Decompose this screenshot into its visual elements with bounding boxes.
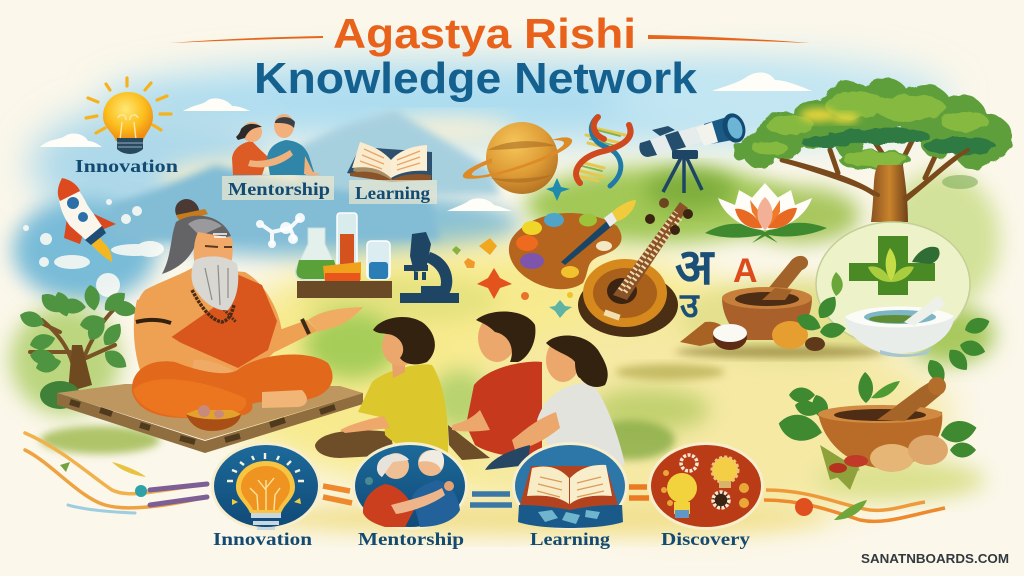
script glyphs xyxy=(675,238,758,326)
crossed legs xyxy=(132,354,333,418)
icon: light bulb top xyxy=(86,78,171,154)
arm band xyxy=(136,320,171,323)
star: teal xyxy=(546,178,570,201)
hand raised xyxy=(308,307,363,332)
badge: learning xyxy=(512,442,628,530)
title line one: Agastya Rishi xyxy=(333,10,636,57)
label: Learning top xyxy=(349,180,437,204)
icon: planet xyxy=(463,122,572,194)
face xyxy=(194,232,233,282)
icon: rocket xyxy=(58,178,116,262)
script glyphs: अ xyxy=(675,238,715,296)
icon: white mortar and pestle xyxy=(845,296,992,386)
icon: veena instrument xyxy=(578,198,693,337)
offering bowl xyxy=(186,405,241,431)
raised arm xyxy=(252,320,317,353)
icon: wooden mortar xyxy=(680,256,847,351)
title xyxy=(170,10,810,103)
icon: microscope xyxy=(400,232,459,303)
ground wash xyxy=(10,167,1000,536)
connector: learning to discovery xyxy=(629,487,649,498)
title line right xyxy=(648,35,810,43)
sky wash xyxy=(13,58,950,302)
mountains xyxy=(110,110,500,240)
icon: telescope xyxy=(639,110,749,193)
label: Innovation top: Innovation xyxy=(75,156,178,176)
icon: mentorship figures xyxy=(232,114,322,176)
lowered arm xyxy=(134,295,202,364)
connector: mentorship to learning xyxy=(470,494,512,505)
title line two: Knowledge Network xyxy=(254,54,698,103)
tree large xyxy=(732,78,1012,222)
connector: innovation to mentorship xyxy=(323,486,352,503)
icon: lotus xyxy=(705,183,827,243)
badge: innovation xyxy=(211,442,321,530)
eyes and brows xyxy=(205,246,232,247)
icon: flasks and test tubes xyxy=(256,213,392,298)
clouds xyxy=(40,72,812,211)
label: Mentorship top: Mentorship xyxy=(228,179,330,199)
icon: DNA helix xyxy=(574,117,631,186)
icon: mortar with herbs xyxy=(776,372,979,490)
stone platform xyxy=(57,384,363,453)
label: Innovation bottom: Innovation xyxy=(213,529,312,549)
label: Mentorship top xyxy=(222,176,334,200)
script glyphs: उ xyxy=(679,286,700,326)
label: Mentorship bottom: Mentorship xyxy=(358,529,464,549)
hair and bun xyxy=(162,199,231,274)
figure: boy in yellow shirt xyxy=(315,317,448,458)
rudraksha necklace xyxy=(192,290,234,322)
label: Discovery bottom: Discovery xyxy=(661,529,750,549)
icon: herb cross emblem xyxy=(816,222,970,346)
torso xyxy=(134,268,282,380)
cloud puffs near rocket xyxy=(23,199,164,297)
label: Learning top: Learning xyxy=(355,183,430,203)
robe over shoulder xyxy=(170,272,277,368)
label: Learning bottom: Learning xyxy=(530,529,610,549)
figure: Agastya Rishi xyxy=(132,199,363,418)
sparkle stars xyxy=(452,238,573,318)
watermark: SANATNBOARDS.COM xyxy=(861,551,1009,566)
ribbon left xyxy=(25,433,207,513)
title line left xyxy=(170,36,323,43)
script glyphs: A xyxy=(733,252,758,290)
tree left xyxy=(17,284,139,409)
ribbon right xyxy=(764,490,945,521)
lower hand xyxy=(192,360,235,383)
badge: discovery xyxy=(648,442,764,530)
beard xyxy=(192,256,238,310)
figure: girl in white shirt xyxy=(485,335,625,470)
icon: painted palette xyxy=(509,200,636,289)
forehead mark xyxy=(213,234,227,237)
icon: open book top xyxy=(347,142,432,182)
figure: boy in red shirt xyxy=(448,312,542,460)
badge: mentorship xyxy=(352,442,468,530)
